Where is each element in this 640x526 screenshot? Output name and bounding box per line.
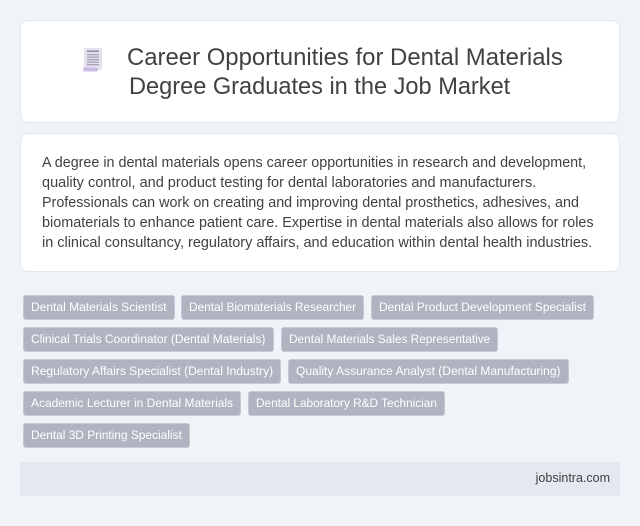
tag: Dental Laboratory R&D Technician [256,396,437,410]
tag [288,359,569,384]
tag [23,295,175,320]
tag: Dental Product Development Specialist [379,300,586,314]
header panel [20,20,620,123]
tag: Regulatory Affairs Specialist (Dental Industry) [31,364,273,378]
tag: Clinical Trials Coordinator (Dental Materials) [31,332,265,346]
footer bar [20,462,620,496]
tag [248,391,445,416]
description text: biomaterials to enhance patient care. Expertise in dental materials also allows for roles [42,215,594,231]
icon: document scroll [83,48,102,72]
tag [281,327,498,352]
description text: Professionals can work on creating and improving dental prosthetics, adhesives, and [42,195,579,211]
tag: Quality Assurance Analyst (Dental Manufacturing) [296,364,561,378]
tag [23,423,190,448]
title: Career Opportunities for Dental Materials [127,44,563,71]
tag: Dental Materials Sales Representative [289,332,490,346]
tag [181,295,364,320]
description text [42,155,594,251]
description panel [20,133,620,272]
title: Degree Graduates in the Job Market [129,73,510,100]
tag: Academic Lecturer in Dental Materials [31,396,233,410]
tag [23,359,281,384]
tag: Dental Materials Scientist [31,300,167,314]
tag [371,295,594,320]
description text: quality control, and product testing for dental laboratories and manufacturers. [42,175,536,191]
description text: A degree in dental materials opens career opportunities in research and development, [42,155,586,171]
tag: Dental Biomaterials Researcher [189,300,356,314]
tag: Dental 3D Printing Specialist [31,428,182,442]
tag [23,327,274,352]
tag [23,391,241,416]
job tags [23,295,594,448]
description text: in clinical consultancy, regulatory affairs, and education within dental health industries. [42,235,592,251]
title [127,44,563,100]
footer text: jobsintra.com [536,471,610,485]
